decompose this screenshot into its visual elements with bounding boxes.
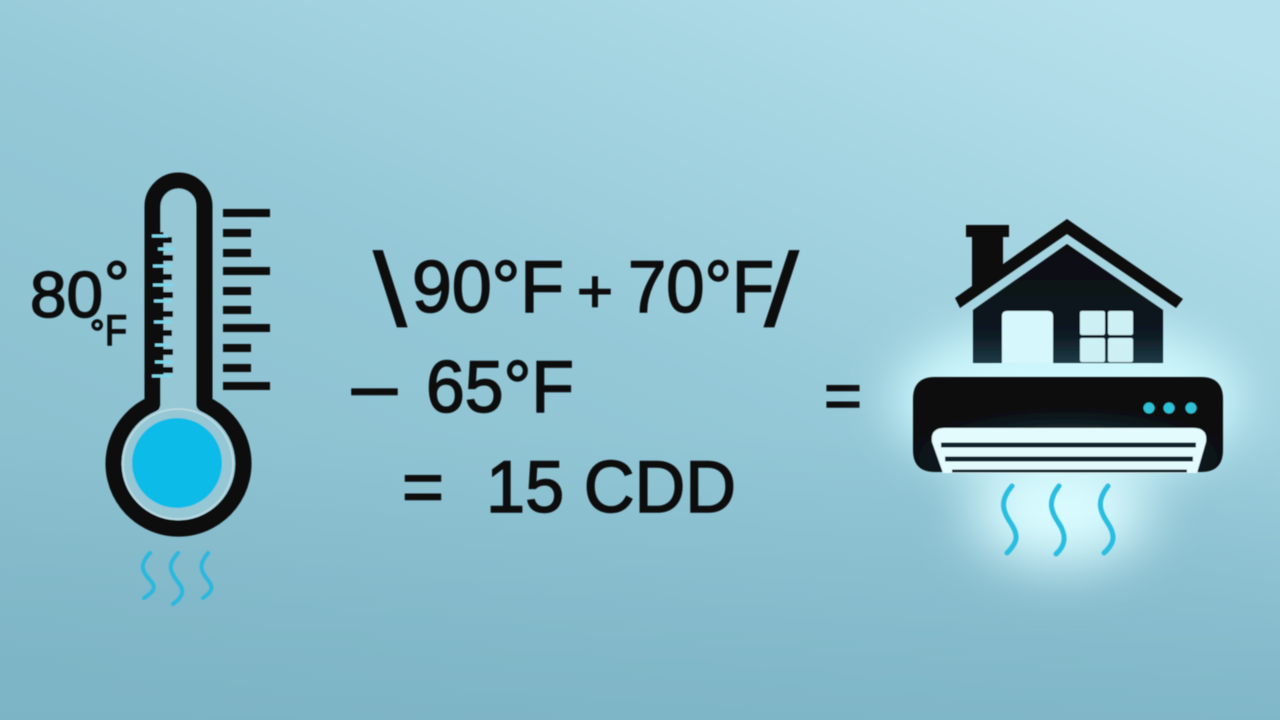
equation line 2: minus 65°F: 65°F: [426, 347, 574, 428]
icon: thermometer heat waves: [143, 553, 212, 604]
house body: [973, 244, 1163, 363]
equation line 3: equals 15 CDD: 15 CDD: [486, 447, 736, 528]
door: [1002, 311, 1053, 363]
equation line 1: 90°F + 70°F: 90°F: [412, 247, 564, 328]
air conditioner vent: [932, 428, 1206, 473]
air conditioner indicator lights: [1144, 402, 1196, 414]
blue mercury bulb: [132, 418, 222, 508]
air conditioner body: [913, 377, 1223, 472]
equation: [352, 233, 862, 528]
chimney: [966, 225, 1009, 290]
equation line 1: 90°F + 70°F: +: [577, 258, 613, 325]
icon: thermometer: [30, 180, 270, 604]
icon: cold air waves: [1004, 486, 1113, 554]
inner scale ticks: [152, 232, 175, 376]
equation line 1: 90°F + 70°F: /: [764, 233, 799, 349]
icon: house with air conditioner: [913, 219, 1223, 554]
roof: [955, 219, 1183, 308]
thermometer outline: [113, 180, 243, 529]
equation line 2: minus 65°F: –: [352, 340, 398, 429]
equation line 3: equals 15 CDD: =: [402, 447, 444, 528]
thermometer reading 80 degrees F: 80: [30, 258, 103, 331]
thermometer glass fill: [121, 182, 233, 519]
equation line 2: minus 65°F: [352, 340, 574, 429]
equation line 1: 90°F + 70°F: [373, 233, 799, 349]
equation line 1: 90°F + 70°F: \: [373, 233, 407, 349]
thermometer reading 80 degrees F: °: [90, 312, 104, 353]
bulb inner ring: [123, 409, 233, 519]
thermometer reading 80 degrees F: [30, 248, 130, 355]
window: [1080, 311, 1133, 362]
outer scale ticks: [223, 213, 270, 386]
glow behind air conditioner: [893, 320, 1243, 565]
equation line 1: 90°F + 70°F: 70°F: [628, 247, 774, 328]
equals sign before house icon: =: [824, 358, 862, 432]
thermometer reading 80 degrees F: °: [104, 248, 130, 320]
thermometer reading 80 degrees F: F: [105, 307, 127, 355]
